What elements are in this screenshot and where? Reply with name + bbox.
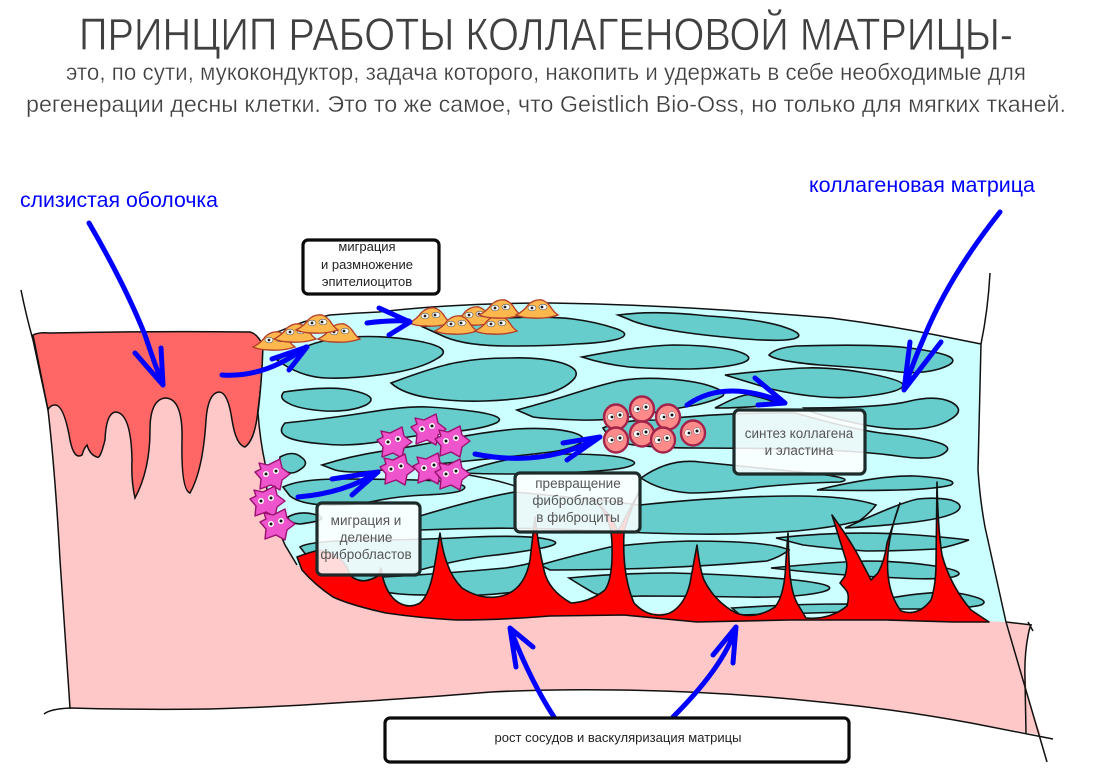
arrow: epithelial migration right xyxy=(367,308,410,335)
subtitle text: это, по сути, мукокондуктор, задача которого, накопить и удержать в себе необходимые для xyxy=(66,59,1026,85)
callout: fibroblast conversion: фибробластов xyxy=(532,493,624,508)
epithelial cells xyxy=(253,300,558,350)
callout: vascularization xyxy=(385,718,849,762)
collagen fibre bundles xyxy=(277,313,984,615)
arrow: vessel growth left xyxy=(510,628,554,717)
callout: fibroblast migration: фибробластов xyxy=(320,547,412,562)
callout: fibroblast conversion: в фиброциты xyxy=(536,510,620,525)
arrow: to collagen matrix xyxy=(904,212,1000,390)
arrow: epithelial migration up xyxy=(222,347,307,375)
callout: fibroblast migration xyxy=(317,503,420,575)
arrow: vessel growth right xyxy=(673,627,736,717)
label: mucosa: слизистая оболочка xyxy=(20,189,218,212)
callout: epithelial migration xyxy=(303,239,439,294)
collagen matrix body xyxy=(258,303,1006,622)
callout: epithelial migration: эпителиоцитов xyxy=(322,274,412,289)
fibrocyte cells xyxy=(604,396,705,452)
callout: fibroblast conversion: превращение xyxy=(535,476,621,491)
arrow: fibroblast migration xyxy=(298,472,378,497)
callout: collagen synthesis: и эластина xyxy=(765,443,834,458)
subtitle text xyxy=(26,59,1066,117)
blood vessels xyxy=(297,482,989,622)
callout: fibroblast migration: миграция и xyxy=(331,513,401,528)
callout: fibroblast migration: деление xyxy=(340,530,392,545)
callout: collagen synthesis: синтез коллагена xyxy=(745,426,854,441)
subtitle text: регенерации десны клетки. Это то же самое, что Geistlich Bio-Oss, но только для мягких тканей. xyxy=(26,91,1066,117)
callout: epithelial migration: и размножение xyxy=(321,257,413,272)
label: collagen matrix: коллагеновая матрица xyxy=(809,174,1035,197)
mucosa: red epithelium with rete ridges xyxy=(33,332,263,498)
callout: epithelial migration: миграция xyxy=(338,239,396,254)
outline strokes of gum and matrix xyxy=(21,273,1053,762)
callout: vascularization: рост сосудов и васкуляризация матрицы xyxy=(494,730,742,745)
arrow: fibroblast to fibrocyte xyxy=(475,437,600,460)
arrow: to mucosa xyxy=(89,223,163,385)
arrow: collagen synthesis xyxy=(687,378,785,405)
callout: collagen synthesis xyxy=(734,410,865,474)
callout: fibroblast conversion xyxy=(515,473,640,532)
connective tissue: pink gum xyxy=(33,340,1041,735)
fibroblast cells xyxy=(250,414,470,540)
